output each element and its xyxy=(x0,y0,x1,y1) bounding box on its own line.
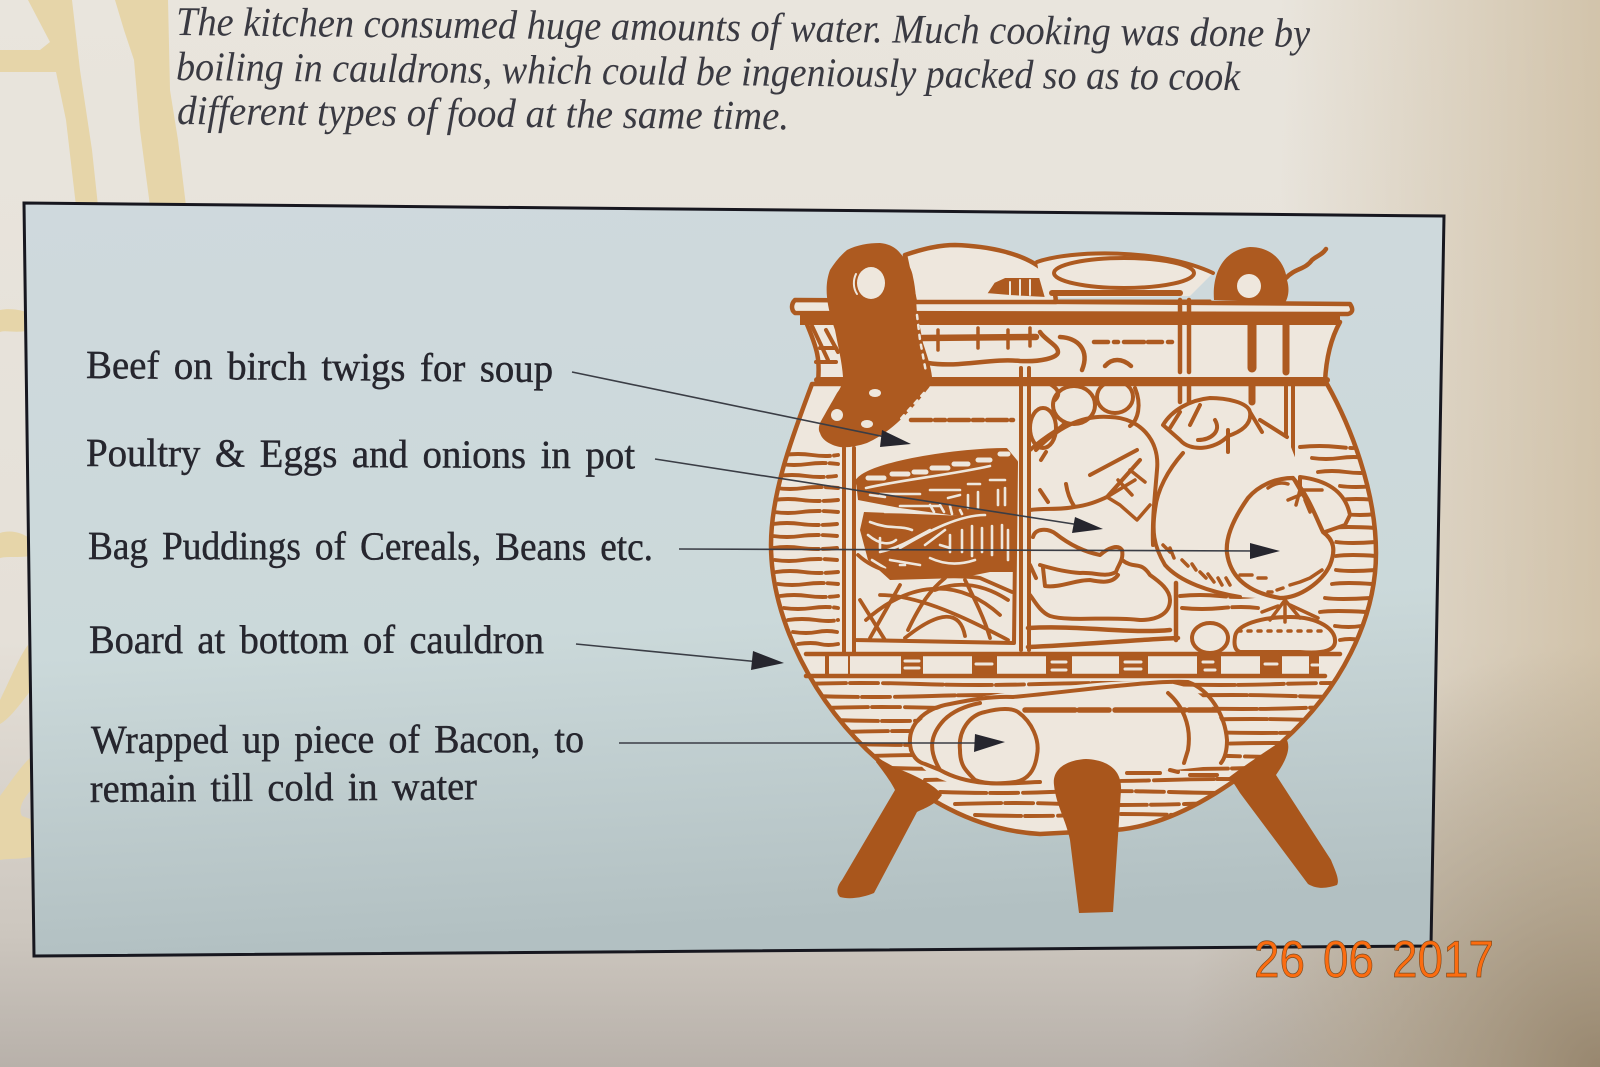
lid hatch xyxy=(986,277,1046,298)
round pudding xyxy=(1227,477,1350,598)
illustration: cauldron xyxy=(771,243,1412,913)
intro text: boiling in cauldrons, which could be ingeniously packed so as to cook xyxy=(176,43,1241,99)
labels xyxy=(86,342,653,811)
bag pudding sack xyxy=(1154,398,1335,600)
arrow: bacon xyxy=(619,734,1005,752)
centre leg xyxy=(1054,759,1121,913)
left leg xyxy=(837,758,942,898)
neck details xyxy=(812,300,1293,475)
dividers between compartments xyxy=(844,368,1029,654)
lid xyxy=(905,245,1056,302)
arrow: bag pudding xyxy=(679,543,1280,559)
board at bottom of cauldron xyxy=(806,654,1340,676)
label: board: Board at bottom of cauldron xyxy=(89,617,544,662)
water hatching xyxy=(773,446,1412,816)
plate xyxy=(1037,253,1213,301)
intro text xyxy=(176,0,1311,138)
bacon end xyxy=(960,709,1038,783)
label: poultry: Poultry & Eggs and onions in pot xyxy=(86,430,635,477)
small pudding and ball xyxy=(1192,600,1335,653)
poultry and eggs pot xyxy=(1028,417,1178,647)
label: bag puddings: Bag Puddings of Cereals, Beans etc. xyxy=(88,523,653,569)
decorative tan tree branches xyxy=(0,0,186,860)
rim xyxy=(792,300,1352,380)
label: beef: Beef on birch twigs for soup xyxy=(86,342,553,391)
photo date stamp: 26 06 2017 xyxy=(1254,931,1494,989)
wrapped bacon xyxy=(910,681,1227,787)
panel: cauldron diagram background xyxy=(24,203,1444,956)
cauldron body xyxy=(771,384,1376,834)
label: bacon line 2: remain till cold in water xyxy=(90,763,477,811)
right handle with string xyxy=(1214,247,1326,303)
arrow: poultry xyxy=(655,459,1103,533)
label: bacon line 1: Wrapped up piece of Bacon, to xyxy=(91,716,584,762)
arrow: beef xyxy=(572,372,911,447)
cauldron neck xyxy=(806,322,1340,382)
left handle xyxy=(819,243,932,447)
sack knot xyxy=(1163,398,1287,452)
beef on birch twigs xyxy=(854,450,1016,643)
arrow: board xyxy=(576,644,784,670)
intro text: different types of food at the same time. xyxy=(177,87,789,138)
stones xyxy=(1030,381,1139,450)
right leg xyxy=(1228,738,1338,888)
